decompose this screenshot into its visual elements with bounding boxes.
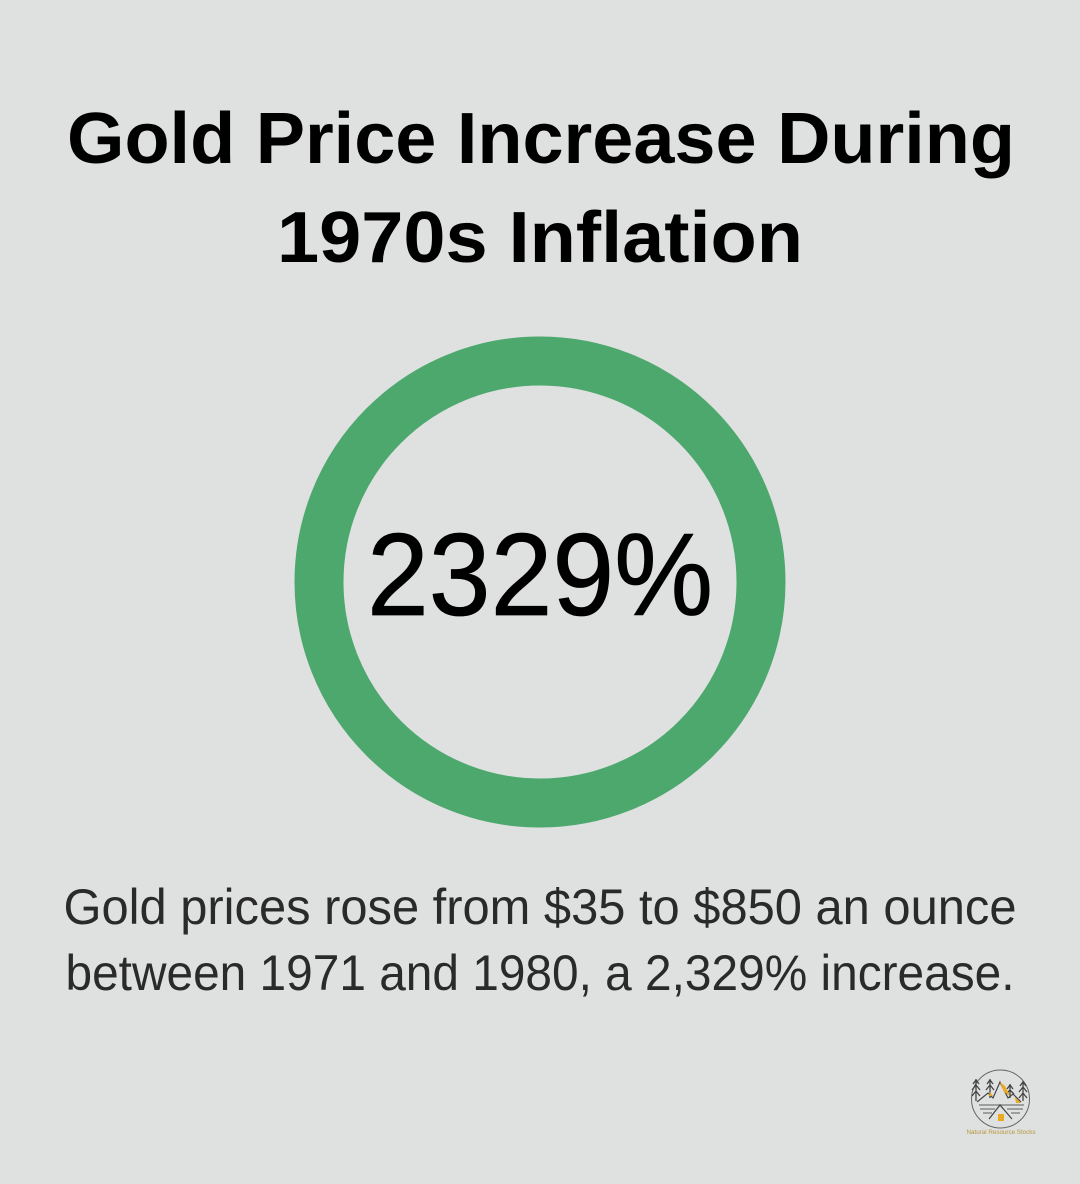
- logo ring: [972, 1070, 1030, 1128]
- description: between 1971 and 1980, a 2,329% increase.: [66, 945, 1014, 1001]
- title: [67, 99, 1015, 278]
- logo caption: Natural Resource Stocks: [966, 1129, 1036, 1136]
- logo: Natural Resource Stocks: [966, 1070, 1036, 1136]
- logo mountains: [977, 1082, 1021, 1102]
- logo water lines: [979, 1105, 1024, 1113]
- center value: 2329%: [367, 509, 713, 640]
- title: 1970s Inflation: [277, 198, 803, 278]
- description: [64, 879, 1016, 1001]
- logo cabin: [989, 1105, 1012, 1119]
- title: Gold Price Increase During: [67, 99, 1015, 179]
- donut ring: [319, 361, 761, 803]
- description: Gold prices rose from $35 to $850 an ounce: [64, 879, 1016, 935]
- logo trees: [972, 1079, 1027, 1101]
